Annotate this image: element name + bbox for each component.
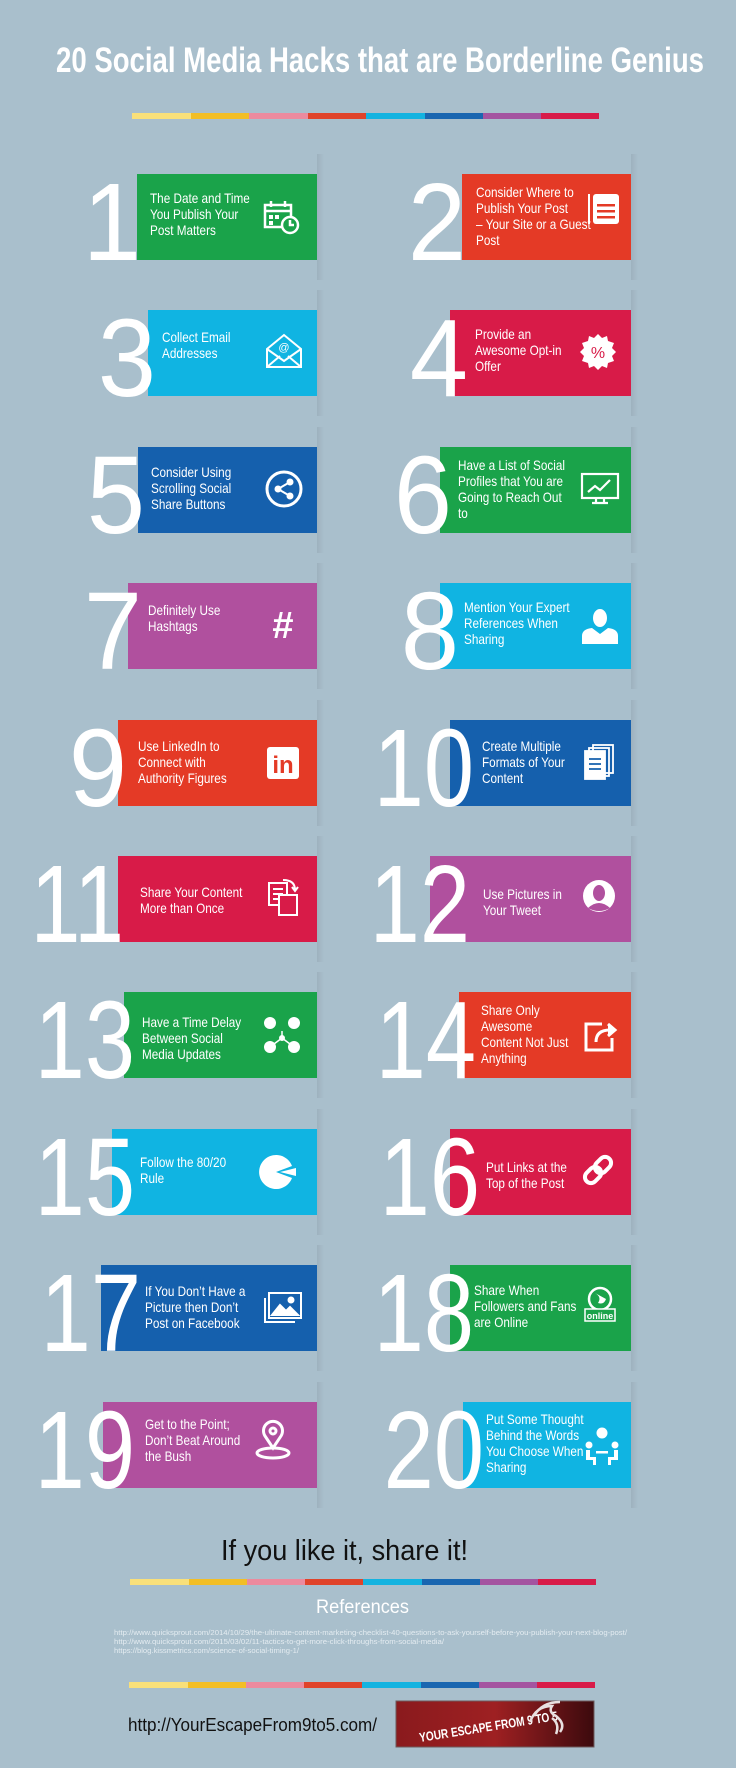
card 2: Consider Where to	[476, 185, 574, 200]
icon: online	[585, 1288, 615, 1321]
card 14: Anything	[481, 1051, 527, 1066]
card 1: Post Matters	[150, 223, 216, 238]
card 17: Post on Facebook	[145, 1316, 240, 1331]
card 9: Authority Figures	[138, 771, 227, 786]
card 11	[30, 836, 324, 966]
card 19: 19	[35, 1390, 135, 1512]
card 14: Awesome	[481, 1019, 532, 1034]
card 1	[83, 154, 324, 284]
color bar middle	[130, 1579, 596, 1585]
card 12: Use Pictures in	[483, 887, 562, 902]
icon: map pin	[257, 1421, 289, 1458]
references list	[114, 1630, 627, 1655]
icon: copy	[269, 880, 298, 915]
card 14	[376, 972, 638, 1102]
icon: images	[265, 1293, 301, 1322]
card 9: 9	[69, 707, 127, 830]
card 3: 3	[98, 297, 156, 420]
card 20	[384, 1382, 638, 1512]
icon: conversation	[586, 1428, 618, 1465]
card 11: 11	[30, 844, 124, 966]
card 11: More than Once	[140, 901, 224, 916]
card 2: 2	[408, 161, 466, 284]
card 16	[380, 1109, 638, 1239]
icon: bird swirl	[530, 1702, 562, 1734]
card 6: Profiles that You are	[458, 474, 563, 489]
card 9: Use LinkedIn to	[138, 739, 220, 754]
card 8: Sharing	[464, 632, 504, 647]
card 7: Definitely Use	[148, 603, 220, 618]
references heading: References	[316, 1597, 409, 1618]
card 5: Consider Using	[151, 465, 231, 480]
card 13: Have a Time Delay	[142, 1015, 242, 1030]
references list: https://blog.kissmetrics.com/science-of-social-timing-1/	[114, 1648, 299, 1655]
card 2: – Your Site or a Guest	[476, 217, 591, 232]
card 16: Top of the Post	[486, 1176, 565, 1191]
icon: percent badge	[580, 334, 616, 370]
card 12: 12	[370, 844, 470, 966]
card 2: Publish Your Post	[476, 201, 568, 216]
card 7: 7	[84, 570, 142, 693]
card 16: 16	[380, 1117, 480, 1239]
card 17: 17	[41, 1253, 141, 1375]
share call to action: If you like it, share it!	[221, 1535, 468, 1567]
card 4: Provide an	[475, 327, 531, 342]
logo: YOUR ESCAPE FROM 9 TO 5	[418, 1708, 559, 1745]
card 14: 14	[376, 980, 476, 1102]
card 20: You Choose When	[486, 1444, 583, 1459]
icon: linkedin: in	[272, 752, 294, 779]
card 1: The Date and Time	[150, 191, 250, 206]
card 20: Sharing	[486, 1460, 526, 1475]
icon: social network	[264, 1017, 300, 1053]
card 18	[374, 1245, 638, 1375]
card 7	[84, 563, 324, 693]
card 18: Followers and Fans	[474, 1299, 576, 1314]
card 15: 15	[35, 1117, 135, 1239]
card 6	[394, 427, 638, 557]
card 15: Rule	[140, 1171, 164, 1186]
card 6: Going to Reach Out	[458, 490, 562, 505]
card 4: Offer	[475, 359, 501, 374]
icon: share	[267, 472, 301, 506]
card 3	[98, 290, 324, 420]
card 14: Share Only	[481, 1003, 540, 1018]
card 11: Share Your Content	[140, 885, 243, 900]
card 19: Get to the Point;	[145, 1417, 230, 1432]
icon: hashtag: #	[272, 605, 294, 647]
icon: envelope: @	[278, 342, 290, 354]
website url: http://YourEscapeFrom9to5.com/	[128, 1715, 377, 1735]
color bar top	[132, 113, 599, 119]
card 14: Content Not Just	[481, 1035, 569, 1050]
card 5: 5	[87, 434, 145, 557]
card 9	[69, 700, 324, 830]
card 8: 8	[401, 570, 459, 693]
card 10: Formats of Your	[482, 755, 565, 770]
icon: share arrow	[586, 1024, 615, 1050]
card 1: 1	[83, 161, 141, 284]
card 5: Scrolling Social	[151, 481, 231, 496]
card 20: Put Some Thought	[486, 1412, 584, 1427]
card 19: the Bush	[145, 1449, 191, 1464]
card 2: Post	[476, 233, 500, 248]
icon: person	[582, 609, 618, 644]
card 13: 13	[35, 980, 135, 1102]
card 15: Follow the 80/20	[140, 1155, 226, 1170]
card 12: Your Tweet	[483, 903, 542, 918]
icon: online: online	[587, 1311, 613, 1321]
card 16: Put Links at the	[486, 1160, 567, 1175]
card 8	[401, 563, 638, 693]
card 4: 4	[410, 297, 468, 420]
card 8: Mention Your Expert	[464, 600, 570, 615]
card 12	[370, 836, 638, 966]
card 3: Collect Email	[162, 330, 230, 345]
card 13	[35, 972, 324, 1102]
icon: percent badge: %	[591, 345, 605, 362]
card 1: You Publish Your	[150, 207, 238, 222]
card 5	[87, 427, 324, 557]
icon: linkedin	[267, 747, 299, 779]
card 3: Addresses	[162, 346, 217, 361]
card 20: 20	[384, 1390, 484, 1512]
card 8: References When	[464, 616, 558, 631]
card 9: Connect with	[138, 755, 206, 770]
card 7: Hashtags	[148, 619, 198, 634]
references list: http://www.quicksprout.com/2015/03/02/11-tactics-to-get-more-click-throughs-from-social-media/	[114, 1639, 444, 1646]
card 6: Have a List of Social	[458, 458, 565, 473]
card 2	[408, 154, 638, 284]
card 10: Create Multiple	[482, 739, 561, 754]
card 19	[35, 1382, 324, 1512]
card 15	[35, 1109, 324, 1239]
card 10: 10	[374, 708, 474, 830]
icon: avatar	[583, 880, 615, 912]
icon: calendar	[265, 201, 298, 233]
card 10	[374, 700, 638, 830]
icon: article	[589, 194, 619, 224]
card 20: Behind the Words	[486, 1428, 579, 1443]
icon: envelope	[267, 335, 301, 367]
card 18: Share When	[474, 1283, 539, 1298]
card 13: Media Updates	[142, 1047, 221, 1062]
color bar bottom	[129, 1682, 595, 1688]
icon: link	[582, 1154, 614, 1186]
card 10: Content	[482, 771, 524, 786]
card 4: Awesome Opt-in	[475, 343, 562, 358]
card 6: to	[458, 506, 468, 521]
references list: http://www.quicksprout.com/2014/10/29/the-ultimate-content-marketing-checklist-40-questions-to-ask-yourself-before-you-publish-your-next-blog-post/	[114, 1630, 627, 1637]
card 17	[41, 1245, 324, 1375]
card 6: 6	[394, 434, 452, 557]
card 5: Share Buttons	[151, 497, 225, 512]
card 18: are Online	[474, 1315, 528, 1330]
icon: documents	[585, 745, 613, 779]
card 18: 18	[374, 1253, 474, 1375]
icon: monitor chart	[582, 474, 618, 503]
card 19: Don’t Beat Around	[145, 1433, 240, 1448]
icon: pie chart	[259, 1155, 296, 1189]
card 13: Between Social	[142, 1031, 223, 1046]
card 17: Picture then Don’t	[145, 1300, 239, 1315]
card 17: If You Don’t Have a	[145, 1284, 246, 1299]
card 4	[410, 290, 638, 420]
